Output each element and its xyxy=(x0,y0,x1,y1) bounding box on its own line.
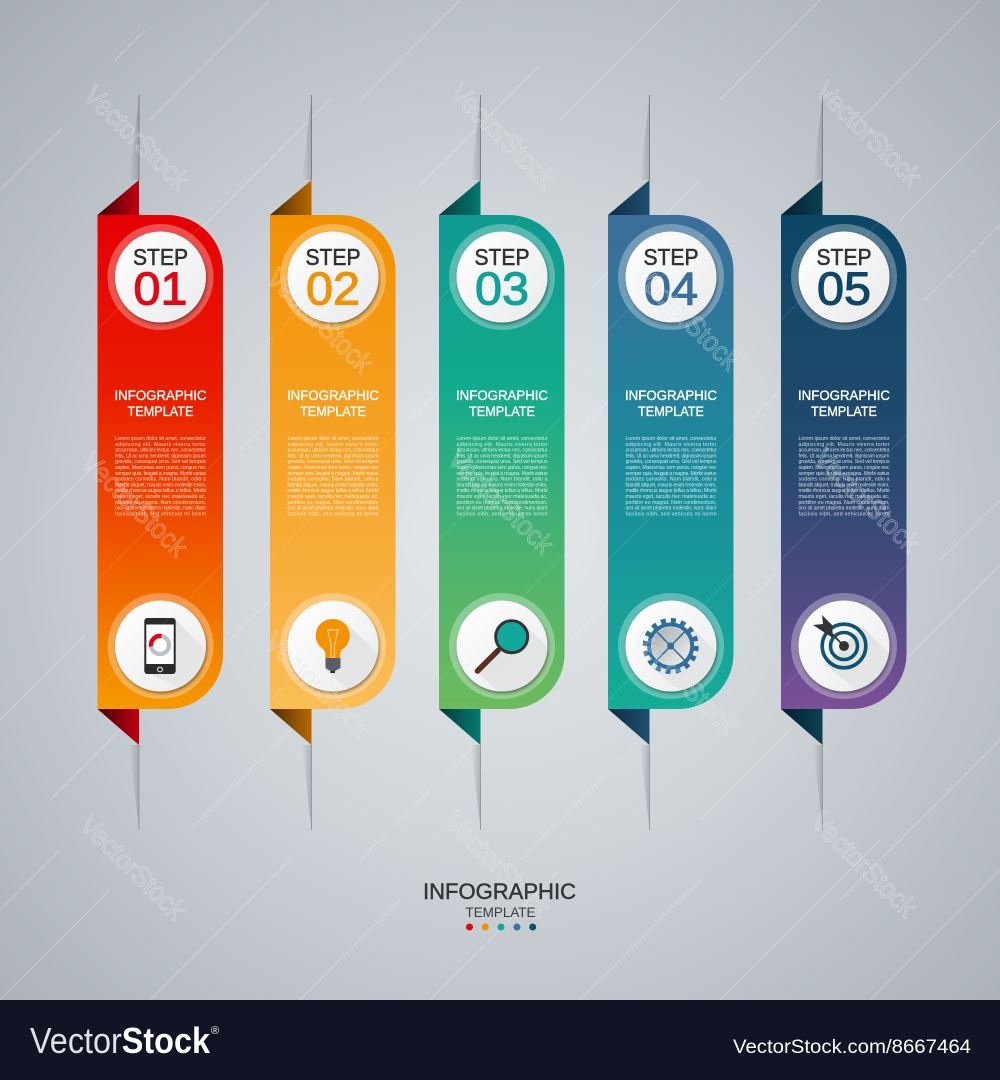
heading xyxy=(798,388,890,419)
badge: step 05 xyxy=(791,224,897,330)
badge: step 01: 01 xyxy=(134,262,188,314)
badge: step 01: STEP xyxy=(133,244,188,270)
ribbon body xyxy=(98,215,223,709)
icon: gear xyxy=(642,618,716,690)
body text: sodales convallis. Nam blandit, odio a xyxy=(456,477,548,483)
footer url: VectorStock.com/8667464 xyxy=(733,1037,971,1058)
legend dots xyxy=(466,924,536,930)
heading: INFOGRAPHIC xyxy=(798,388,890,403)
watermark: VectorStock row 5: VectorStock xyxy=(805,806,923,924)
heading: TEMPLATE xyxy=(128,404,194,419)
badge: step 03: 03 xyxy=(475,262,529,314)
body text: gravida, consequat urna. Sed vel tempus xyxy=(115,459,206,465)
body text: sodales convallis. Nam blandit, odio a xyxy=(798,477,890,483)
body text: accumsan, ultricies lectus nec, consectetur xyxy=(456,448,548,454)
body text: sapien. Maecenas sem purus, congue nec xyxy=(626,465,717,471)
badge: step 04 xyxy=(618,224,724,330)
icon disc xyxy=(791,593,897,699)
watermark: VectorStock row 4: VectorStock xyxy=(259,626,377,744)
badge: step 03 xyxy=(449,224,555,330)
body text: blandit aliquet, mauris enim molestie enim, xyxy=(626,482,716,488)
body text: orci sit amet pharetra molestie, nunc diam xyxy=(456,506,548,512)
heading: INFOGRAPHIC xyxy=(625,388,717,403)
title block: INFOGRAPHIC xyxy=(423,879,576,904)
watermark: VectorStock row 5: VectorStock xyxy=(74,809,192,927)
body text: mattis rhoncus augue tellus a tellus. Morbi xyxy=(456,488,548,494)
body text xyxy=(798,436,890,517)
ribbon body xyxy=(608,215,734,709)
body text xyxy=(288,436,379,517)
watermark: VectorStock row 3: VectorStock xyxy=(808,442,926,560)
watermark: VectorStock row 4 xyxy=(259,624,744,744)
watermark: VectorStock row 5 xyxy=(74,806,923,927)
badge: step 01 xyxy=(108,224,214,330)
body text: semper quis, feugiat a magna. Morbi varius xyxy=(456,471,548,477)
body text: gravida, consequat urna. Sed vel tempus xyxy=(798,459,890,465)
badge: step 05: STEP xyxy=(816,244,872,270)
icon disc xyxy=(449,593,555,699)
heading: TEMPLATE xyxy=(300,404,366,419)
body text: mattis rhoncus augue tellus a tellus. Morbi xyxy=(626,488,716,494)
body text: sapien. Maecenas sem purus, congue nec xyxy=(115,465,206,471)
body text: mattis rhoncus augue tellus a tellus. Morbi xyxy=(798,488,890,494)
watermark: VectorStock row 3: VectorStock xyxy=(76,446,194,564)
body text: felis. Ut ac urna hendrerit, dignissim ipsum xyxy=(626,453,717,459)
watermark: VectorStock row 3 xyxy=(76,442,926,564)
body text: accumsan, ultricies lectus nec, consectetur xyxy=(115,448,206,454)
slits and folds ribbon 3 xyxy=(439,95,481,830)
body text: porttitor eu magna. Nam condimentum, xyxy=(288,500,378,506)
body text: felis. Ut ac urna hendrerit, dignissim ipsum xyxy=(456,453,548,459)
body text: mauris eget, iaculis nec malesuada ac, xyxy=(288,494,378,500)
watermark: VectorStock row 1 xyxy=(78,75,928,197)
heading: TEMPLATE xyxy=(469,404,535,419)
body text: Lorem ipsum dolor sit amet, consectetur xyxy=(288,436,379,442)
body text: mauris eget, iaculis nec malesuada ac, xyxy=(456,494,548,500)
body text: porttitor eu magna. Nam condimentum, xyxy=(798,500,890,506)
body text: sapien. Maecenas sem purus, congue nec xyxy=(798,465,890,471)
panel: step 05 ribbon xyxy=(781,215,906,709)
watermark: VectorStock row 2 xyxy=(261,259,746,380)
body text: sapien. Maecenas sem purus, congue nec xyxy=(456,465,548,471)
watermark: VectorStock row 4: VectorStock xyxy=(626,624,744,742)
body text: mauris eget, iaculis nec malesuada ac, xyxy=(626,494,716,500)
footer bar xyxy=(0,1000,1000,1080)
badge: step 05: 05 xyxy=(817,262,871,314)
body text: gravida, consequat urna. Sed vel tempus xyxy=(288,459,379,465)
watermark: VectorStock row 1: VectorStock xyxy=(78,79,196,197)
body text xyxy=(115,436,207,517)
body text: sodales convallis. Nam blandit, odio a xyxy=(115,477,206,483)
body text: felis. Ut ac urna hendrerit, dignissim ipsum xyxy=(288,453,379,459)
body text: orci sit amet pharetra molestie, nunc diam xyxy=(798,506,890,512)
heading: TEMPLATE xyxy=(811,404,877,419)
ribbon body xyxy=(270,215,396,709)
body text: orci sit amet pharetra molestie, nunc diam xyxy=(288,506,379,512)
heading xyxy=(456,388,548,419)
body text: adipiscing elit. Mauris viverra tortor xyxy=(115,442,206,448)
body text: blandit aliquet, mauris enim molestie enim, xyxy=(798,482,890,488)
body text: facilisis nibh, sed vehicula mi lorem xyxy=(115,511,207,517)
badge: step 02: 02 xyxy=(306,262,360,314)
panel: step 03 ribbon xyxy=(439,215,564,709)
watermark: VectorStock row 3: VectorStock xyxy=(442,443,560,561)
body text: semper quis, feugiat a magna. Morbi varius xyxy=(798,471,890,477)
body text: orci sit amet pharetra molestie, nunc diam xyxy=(626,506,717,512)
body text: mauris eget, iaculis nec malesuada ac, xyxy=(798,494,890,500)
icon: smartphone xyxy=(144,618,204,684)
registered mark: ® xyxy=(211,1025,219,1037)
body text: porttitor eu magna. Nam condimentum, xyxy=(456,500,548,506)
body text: Lorem ipsum dolor sit amet, consectetur xyxy=(626,436,717,442)
body text: adipiscing elit. Mauris viverra tortor xyxy=(626,442,717,448)
heading xyxy=(114,388,207,419)
body text: semper quis, feugiat a magna. Morbi varius xyxy=(115,471,206,477)
body text: accumsan, ultricies lectus nec, consectetur xyxy=(626,448,717,454)
badge: step 03: STEP xyxy=(474,244,530,270)
body text: facilisis nibh, sed vehicula mi lorem xyxy=(456,511,548,517)
slits and folds ribbon 2 xyxy=(270,95,312,830)
watermark: VectorStock row 1: VectorStock xyxy=(444,77,562,195)
heading xyxy=(625,388,717,419)
body text xyxy=(456,436,548,517)
body text: sodales convallis. Nam blandit, odio a xyxy=(288,477,379,483)
body text: facilisis nibh, sed vehicula mi lorem xyxy=(626,511,717,517)
body text: Lorem ipsum dolor sit amet, consectetur xyxy=(456,436,548,442)
heading: INFOGRAPHIC xyxy=(114,388,207,403)
title block xyxy=(423,879,576,930)
icon disc xyxy=(280,593,386,699)
body text: Lorem ipsum dolor sit amet, consectetur xyxy=(115,436,206,442)
icon: light bulb xyxy=(316,619,378,688)
body text: semper quis, feugiat a magna. Morbi varius xyxy=(626,471,717,477)
icon: target with dart xyxy=(813,615,888,690)
body text: Lorem ipsum dolor sit amet, consectetur xyxy=(798,436,890,442)
badge: step 04: 04 xyxy=(644,262,698,314)
heading xyxy=(287,388,379,419)
slits and folds ribbon 4 xyxy=(608,95,650,830)
footer logo: VectorStock xyxy=(30,1020,211,1061)
body text: blandit aliquet, mauris enim molestie enim, xyxy=(456,482,548,488)
body text: facilisis nibh, sed vehicula mi lorem xyxy=(798,511,890,517)
body text: felis. Ut ac urna hendrerit, dignissim ipsum xyxy=(798,453,890,459)
body text: adipiscing elit. Mauris viverra tortor xyxy=(456,442,548,448)
body text: felis. Ut ac urna hendrerit, dignissim ipsum xyxy=(115,453,207,459)
body text: accumsan, ultricies lectus nec, consectetur xyxy=(798,448,890,454)
heading: INFOGRAPHIC xyxy=(287,388,379,403)
body text: sapien. Maecenas sem purus, congue nec xyxy=(288,465,379,471)
badge: step 04: STEP xyxy=(644,244,698,270)
badge: step 02: STEP xyxy=(306,244,360,270)
body text: adipiscing elit. Mauris viverra tortor xyxy=(798,442,890,448)
body text: sodales convallis. Nam blandit, odio a xyxy=(626,477,717,483)
panel: step 01 ribbon xyxy=(98,215,223,709)
body text: orci sit amet pharetra molestie, nunc diam xyxy=(115,506,207,512)
title block: TEMPLATE xyxy=(466,904,536,920)
body text: porttitor eu magna. Nam condimentum, xyxy=(626,500,716,506)
body text: facilisis nibh, sed vehicula mi lorem xyxy=(288,511,379,517)
body text: blandit aliquet, mauris enim molestie enim, xyxy=(288,482,378,488)
body text: gravida, consequat urna. Sed vel tempus xyxy=(456,459,548,465)
body text: blandit aliquet, mauris enim molestie enim, xyxy=(115,482,206,488)
body text: porttitor eu magna. Nam condimentum, xyxy=(115,500,206,506)
body text: mauris eget, iaculis nec malesuada ac, xyxy=(115,494,206,500)
icon disc xyxy=(108,593,214,699)
body text: accumsan, ultricies lectus nec, consectetur xyxy=(288,448,379,454)
icon disc xyxy=(618,593,724,699)
body text: semper quis, feugiat a magna. Morbi varius xyxy=(288,471,379,477)
watermark: VectorStock row 2: VectorStock xyxy=(261,262,379,380)
heading: INFOGRAPHIC xyxy=(456,388,548,403)
slits and folds ribbon 1 xyxy=(98,95,140,830)
body text xyxy=(626,436,717,517)
body text: gravida, consequat urna. Sed vel tempus xyxy=(626,459,717,465)
slits and folds ribbon 5 xyxy=(781,95,823,830)
icon: magnifying glass xyxy=(474,619,548,692)
heading: TEMPLATE xyxy=(638,404,704,419)
body text: mattis rhoncus augue tellus a tellus. Morbi xyxy=(288,488,378,494)
highlight lines over ribbons xyxy=(97,214,907,700)
panel: step 02 ribbon xyxy=(270,215,396,709)
ribbon body xyxy=(781,215,906,709)
watermark: VectorStock row 5: VectorStock xyxy=(439,806,557,924)
badge: step 02 xyxy=(280,224,386,330)
watermark: VectorStock row 1: VectorStock xyxy=(810,75,928,193)
body text: adipiscing elit. Mauris viverra tortor xyxy=(288,442,379,448)
watermark: VectorStock row 2: VectorStock xyxy=(628,259,746,377)
panel: step 04 ribbon xyxy=(608,215,734,709)
ribbon body xyxy=(439,215,564,709)
body text: mattis rhoncus augue tellus a tellus. Morbi xyxy=(115,488,206,494)
